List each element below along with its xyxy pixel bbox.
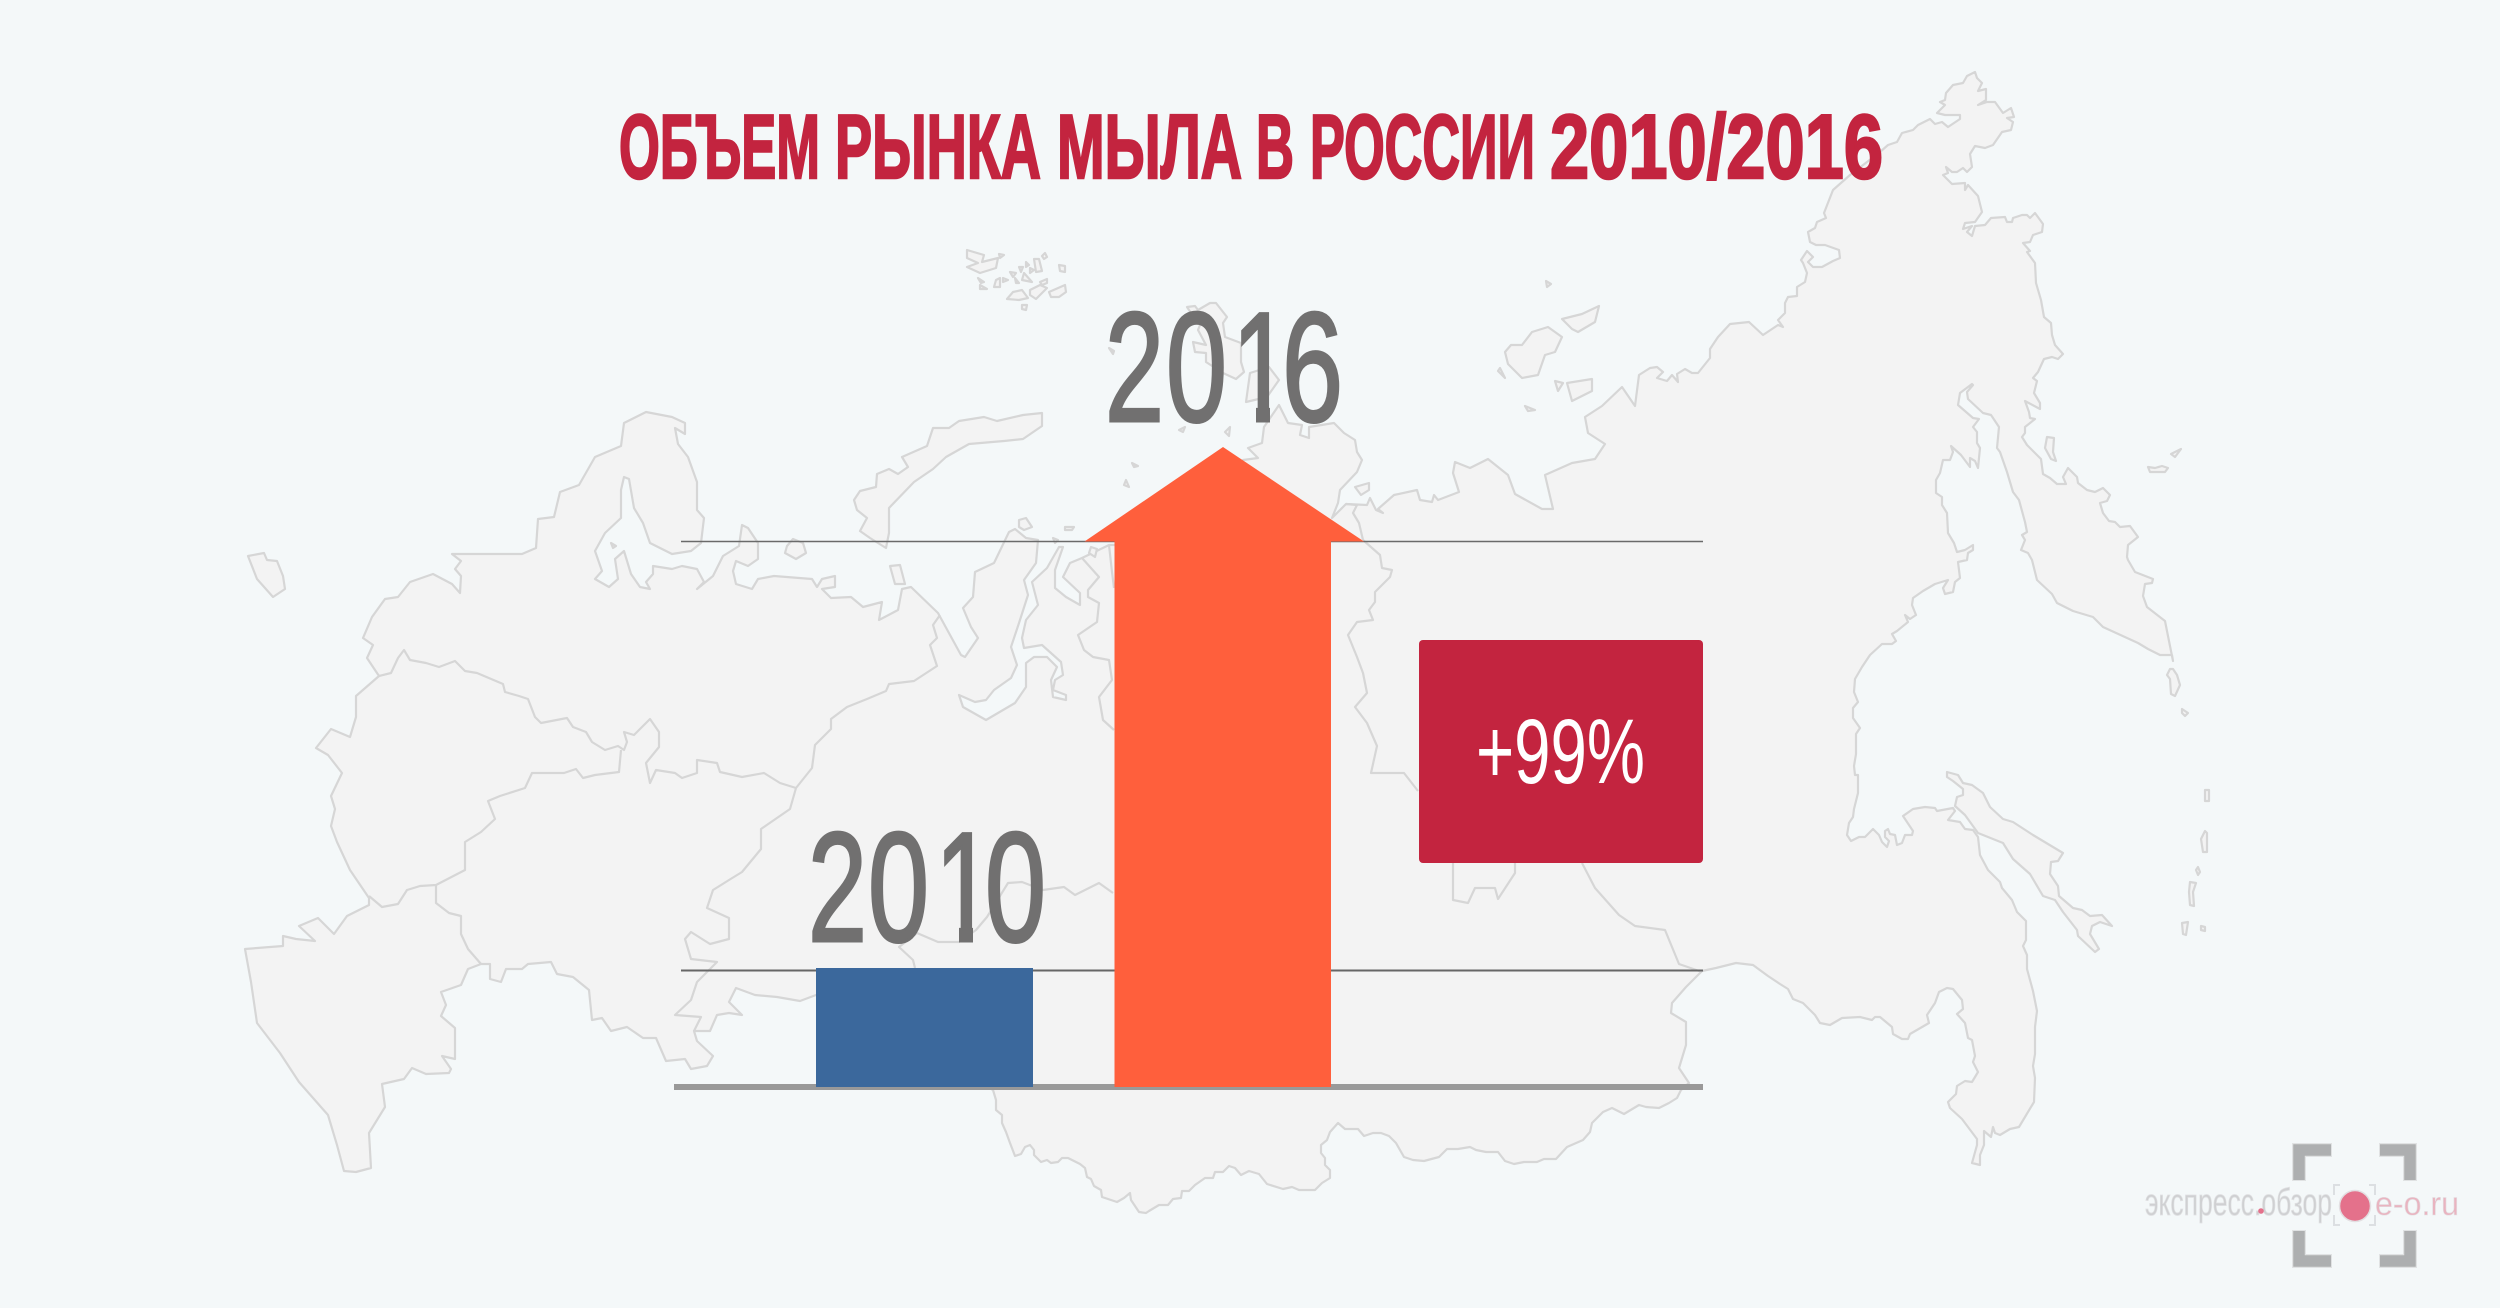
arrow bar: 2016	[1084, 447, 1364, 1087]
callout: growth +99%	[1419, 640, 1703, 863]
label: 2016: 2	[1105, 281, 1164, 455]
callout: growth +99%: +99%	[1476, 701, 1645, 803]
watermark logo	[2145, 1150, 2459, 1261]
label: 2016: 6	[1282, 281, 1343, 455]
label: 2016: 1	[1232, 281, 1291, 455]
background map of Russia	[245, 72, 2209, 1213]
reference line: 2016 level	[681, 540, 1703, 542]
label: 2010: 0	[868, 801, 929, 975]
watermark logo: e-o.ru	[2375, 1185, 2459, 1222]
title: 2010/2016	[1550, 97, 1883, 198]
bar: 2010	[816, 968, 1033, 1087]
title: РОССИИ	[1310, 97, 1535, 198]
label: 2010: 1	[935, 801, 994, 975]
reference line: 2010 level	[681, 970, 1703, 972]
title	[619, 97, 1883, 198]
watermark logo: экспресс.обзор	[2145, 1182, 2332, 1224]
chart baseline	[674, 1084, 1703, 1090]
title: МЫЛА	[1057, 97, 1242, 198]
label: 2016: 0	[1166, 281, 1227, 455]
label: 2016	[1109, 310, 1340, 424]
title: РЫНКА	[835, 97, 1041, 198]
label: 2010: 2	[808, 801, 867, 975]
label: 2010: 0	[985, 801, 1046, 975]
title: ОБЪЕМ	[619, 97, 820, 198]
label: 2010	[812, 830, 1043, 944]
title: В	[1256, 97, 1294, 198]
